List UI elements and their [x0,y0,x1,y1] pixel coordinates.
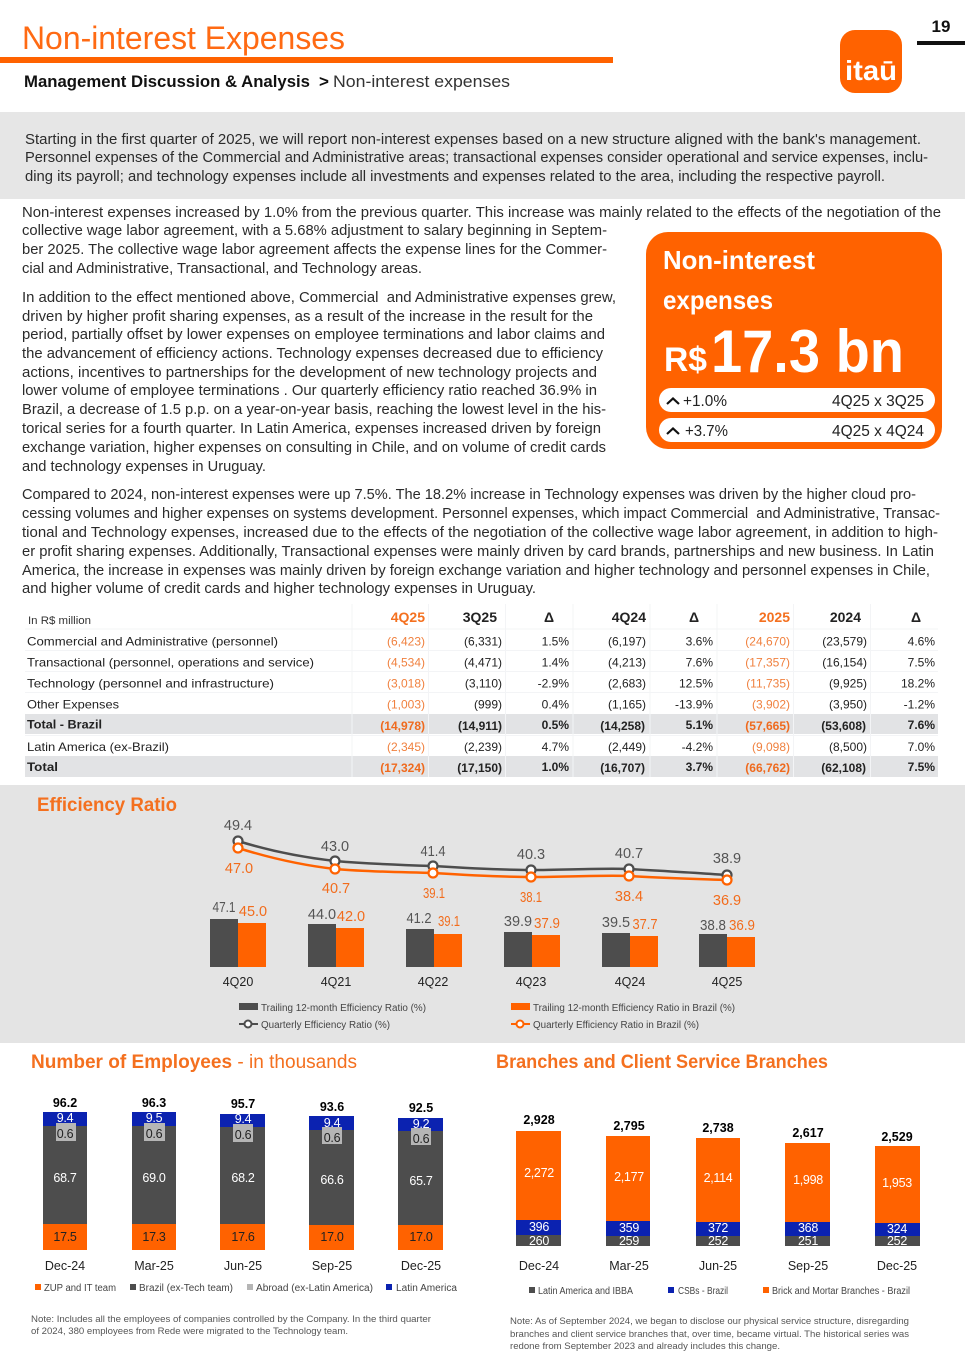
bar: Jun-25: 0.6 [235,1128,252,1142]
bar: Dec-25: 65.7 [409,1174,433,1188]
row: total: (17,324) [380,761,425,775]
pill: quarter on quarter: 4Q25 x 3Q25 [832,393,924,410]
table header: 2025 [759,609,790,625]
bar: Mar-25: 69.0 [142,1171,166,1185]
bar: Mar-25 [606,1119,650,1248]
table header: 4Q25 [391,609,425,625]
intro note band: Starting in the first quarter of 2025, we will report non-interest expenses based on a new structure aligned with the bank's management. [25,132,921,148]
text block: quarterly comparison: cial and Administrative, Transactional, and Technology areas. [22,261,422,277]
row: commercial and administrative: Commercial and Administrative (personnel) [27,634,278,648]
axis labels [519,1259,917,1273]
table header: Δ [911,609,921,625]
bar: Dec-24: 396 [529,1220,549,1234]
bar: Dec-24: 96.2 [53,1096,77,1110]
KPI label [663,245,815,315]
stacked bar chart: employees [43,1096,443,1273]
row: Latin America: -4.2% [682,740,713,754]
text block: drivers: Brazil, a decrease of 1.5 p.p. on a year-on-year basis, reaching the lowest level in the his- [22,402,606,418]
row: total Brazil: 0.5% [542,718,569,732]
bar chart: trailing 12-month ratios: 37.9 [534,916,560,932]
heading: number of employees: Number of Employees - in thousands [31,1051,357,1073]
row: total: (66,762) [745,761,790,775]
row: transactional: 1.4% [542,656,569,670]
row: technology: (3,018) [387,676,425,690]
axis labels: Dec-24 [519,1259,559,1273]
bar chart: trailing 12-month ratios: 44.0 [308,907,336,923]
row: transactional: 7.5% [908,656,935,670]
note: employees [31,1314,431,1337]
axis labels: Dec-25 [877,1259,917,1273]
row: other expenses [27,698,935,712]
row: Latin America: Latin America (ex-Brazil) [27,740,169,754]
bar chart: trailing 12-month ratios [210,900,755,967]
row: Latin America: (8,500) [829,740,867,754]
bar chart: trailing 12-month ratios: 41.2 [406,911,432,927]
bar chart: trailing 12-month ratios: 38.8 [700,918,726,934]
line chart: quarterly efficiency ratio [224,818,741,880]
text block: annual comparison: tional and Technology expenses, increased due to the effects of the negotiation of the collective wage labor agreement, in addition to high- [22,525,938,541]
bar: Jun-25 [696,1121,740,1248]
bar chart: trailing 12-month ratios: 42.0 [337,909,365,925]
panel: branches and client service branches [496,1051,920,1352]
row: commercial and administrative: 3.6% [686,634,713,648]
bar: Dec-24 [43,1096,87,1250]
row: Latin America: (2,239) [464,740,502,754]
row: technology: (3,110) [465,676,502,690]
panel: headline KPI card [646,232,942,449]
legend: employees: ZUP and IT team [44,1283,116,1294]
text block: drivers: actions, incentives to partnerships for the development of new technology projects and [22,365,597,381]
line chart: quarterly efficiency ratio in Brazil: 38.1 [520,890,542,906]
axis labels: Mar-25 [134,1259,174,1273]
legend: efficiency ratio [239,1003,735,1031]
bar: Sep-25: 17.0 [320,1230,344,1244]
text block: annual comparison: and higher volume of credit cards and higher technology expenses in Uruguay. [22,581,536,597]
text block: annual comparison: America, the increase in expenses was mainly driven by foreign exchange variation and higher technology and personnel expenses in Chile, [22,563,930,579]
text block: annual comparison: Compared to 2024, non-interest expenses were up 7.5%. The 18.2% increase in Technology expenses was driven by the higher cloud pro- [22,487,916,503]
note: branches: redone from September 2023 and already includes this change. [510,1341,780,1352]
bar: Jun-25: 252 [708,1234,728,1248]
bar: Dec-25: 17.0 [409,1230,433,1244]
row: commercial and administrative: 4.6% [908,634,935,648]
note: branches [510,1316,909,1352]
row: total Brazil: (14,978) [380,719,425,733]
row: commercial and administrative: (23,579) [822,634,867,648]
bar: Jun-25 [220,1097,265,1250]
legend: branches: Latin America and IBBA [538,1286,633,1297]
row: total: (16,707) [600,761,645,775]
line chart: quarterly efficiency ratio in Brazil: 36.9 [713,893,741,909]
bar: Jun-25: 95.7 [231,1097,255,1111]
pill: quarter on quarter [659,388,935,412]
text block: drivers: and technology expenses in Uruguay. [22,459,266,475]
bar: Dec-25: 252 [887,1234,907,1248]
bar chart: trailing 12-month ratios: 45.0 [239,904,267,920]
row: technology: 18.2% [901,676,935,690]
note: branches: branches and client service branches that, over time, became virtual. The historical series was [510,1329,909,1340]
bar: Sep-25: 1,998 [793,1173,823,1187]
bar: Dec-25: 1,953 [882,1176,912,1190]
bar: Jun-25: 2,738 [702,1121,734,1135]
pill: quarter on quarter: +1.0% [683,393,727,410]
KPI label: expenses [663,285,773,315]
row: Latin America: 7.0% [908,740,935,754]
row: Latin America: (9,098) [752,740,790,754]
axis labels: 4Q22 [418,975,448,989]
row: commercial and administrative: (6,197) [608,634,646,648]
bar: Mar-25: 2,177 [614,1170,644,1184]
row: commercial and administrative [27,634,935,648]
intro note band: ding its payroll; and technology expenses include all investments and expenses related to the area, including the respective payroll. [25,169,885,185]
legend: efficiency ratio: Quarterly Efficiency Ratio (%) [261,1020,390,1031]
table header: Δ [544,609,554,625]
panel: number of employees [31,1051,457,1337]
legend: efficiency ratio: Trailing 12-month Efficiency Ratio in Brazil (%) [533,1003,735,1014]
bar: Sep-25: 0.6 [324,1131,341,1145]
bar chart: trailing 12-month ratios: 39.1 [438,914,460,930]
bar: Sep-25: 66.6 [320,1173,344,1187]
line chart: quarterly efficiency ratio in Brazil: 39.1 [423,886,445,902]
row: transactional [27,656,935,670]
bar: Sep-25 [309,1100,354,1250]
row: other expenses: (1,165) [608,698,646,712]
legend: efficiency ratio: Trailing 12-month Efficiency Ratio (%) [261,1003,426,1014]
text block: drivers: In addition to the effect mentioned above, Commercial and Administrative expenses grew, [22,290,616,306]
pill: year on year: +3.7% [685,423,728,440]
intro note band: Personnel expenses of the Commercial and Administrative areas; transactional expenses consider operational and service expenses, inclu- [25,150,928,166]
bar: Mar-25: 2,795 [613,1119,645,1133]
bar: Dec-25: 92.5 [409,1101,433,1115]
text block: drivers [22,290,616,475]
row: technology: Technology (personnel and infrastructure) [27,676,274,690]
axis labels: Jun-25 [699,1259,737,1273]
legend: employees: Abroad (ex-Latin America) [256,1283,373,1294]
bar: Jun-25: 2,114 [704,1171,733,1185]
title underline [0,57,613,63]
row: other expenses: (3,950) [829,698,867,712]
line chart: quarterly efficiency ratio: 40.3 [517,847,545,863]
line chart: quarterly efficiency ratio: 40.7 [615,846,643,862]
text block: quarterly comparison: ber 2025. The collective wage labor agreement affects the expense lines for the Commer- [22,242,607,258]
table header: In R$ million [28,615,91,627]
legend: branches: CSBs - Brazil [678,1286,728,1297]
text block: drivers: the advancement of efficiency actions. Technology expenses decreased due to efficiency [22,346,604,362]
bar: Dec-25 [398,1101,443,1250]
table header: Δ [689,609,699,625]
text block: quarterly comparison: Non-interest expenses increased by 1.0% from the previous quarter. This increase was mainly related to the effects of the negotiation of the [22,205,941,221]
row: transactional: (16,154) [822,656,867,670]
text block: annual comparison: cessing volumes and higher expenses on systems development. Personnel expenses, which impact Commercial and Administrative, Transac- [22,506,940,522]
bar: Mar-25: 96.3 [142,1096,166,1110]
row: technology: 12.5% [679,676,713,690]
bar: Dec-24 [516,1113,561,1248]
row: Latin America: (2,449) [608,740,646,754]
bar: Dec-24: 2,928 [523,1113,555,1127]
line chart: quarterly efficiency ratio: 38.9 [713,851,741,867]
bar: Dec-25: 9.2 [413,1117,430,1131]
row: total: 7.5% [908,760,935,774]
bar: Dec-24: 68.7 [53,1171,77,1185]
row: total Brazil: (57,665) [745,719,790,733]
axis labels: Jun-25 [224,1259,262,1273]
row: total Brazil [27,718,935,733]
axis labels: Dec-24 [45,1259,85,1273]
text block: drivers: exchange variation, higher expenses on consulting in Chile, and on volume of credit cards [22,440,606,456]
row: total: 1.0% [542,760,569,774]
axis labels: 4Q25 [712,975,742,989]
row: transactional: (4,213) [608,656,646,670]
breadcrumb: Management Discussion & Analysis [24,72,310,91]
line chart: quarterly efficiency ratio: 49.4 [224,818,252,834]
bar: Dec-24: 2,272 [524,1166,554,1180]
bar: Mar-25: 0.6 [146,1127,163,1141]
row: other expenses: (999) [474,698,502,712]
axis labels [45,1259,441,1273]
bar chart: trailing 12-month ratios: 39.5 [602,915,630,931]
bar chart: trailing 12-month ratios: 36.9 [729,918,755,934]
row: transactional: Transactional (personnel, operations and service) [27,656,314,670]
text block: drivers: torical series for a fourth quarter. In Latin America, expenses increased driven by foreign [22,421,601,437]
row: Latin America: (2,345) [387,740,425,754]
bar: Dec-25: 324 [887,1222,907,1236]
bar: Jun-25: 68.2 [231,1171,255,1185]
bar: Sep-25: 93.6 [320,1100,344,1114]
bar: Sep-25: 2,617 [792,1126,824,1140]
stacked bar chart: branches [516,1113,920,1273]
axis labels: Sep-25 [788,1259,828,1273]
row: total: Total [27,760,58,774]
axis labels: 4Q20 [223,975,253,989]
row: commercial and administrative: (24,670) [745,634,790,648]
header [0,17,965,93]
row: technology: (9,925) [829,676,867,690]
row: total Brazil: Total - Brazil [27,718,102,732]
row: Latin America [27,740,935,754]
row: transactional: (4,471) [464,656,502,670]
bar: Dec-25 [875,1130,920,1248]
table header: 4Q24 [612,609,646,625]
axis labels: Sep-25 [312,1259,352,1273]
page number: 19 [932,17,950,36]
line chart: quarterly efficiency ratio: 41.4 [420,844,446,860]
text block: drivers: lower volume of employee terminations . Our quarterly efficiency ratio reached 36.9% in [22,383,597,399]
bar: Dec-24: 9.4 [57,1111,74,1125]
row: Latin America: 4.7% [542,740,569,754]
bar: Sep-25: 251 [798,1234,818,1248]
row: total Brazil: (53,608) [821,719,866,733]
text block: drivers: driven by higher profit sharing expenses, as a result of the increase in the result for the [22,309,593,325]
row: commercial and administrative: (6,331) [464,634,502,648]
axis labels: 4Q23 [516,975,546,989]
row: transactional: (17,357) [745,656,790,670]
row: other expenses: (3,902) [752,698,790,712]
legend: employees [35,1283,457,1294]
row: other expenses: -13.9% [675,698,713,712]
bar chart: trailing 12-month ratios: 47.1 [212,900,236,916]
text block: drivers: period, partially offset by lower expenses on employee terminations and labor claims and [22,327,605,343]
row: technology [27,676,935,690]
note: branches: Note: As of September 2024, we began to disclose our physical service structure, disregarding [510,1316,909,1327]
row: other expenses: Other Expenses [27,698,119,712]
legend: employees: Brazil (ex-Tech team) [139,1283,233,1294]
KPI value: R$ [664,341,707,379]
legend: efficiency ratio: Quarterly Efficiency Ratio in Brazil (%) [533,1020,699,1031]
bar: Mar-25: 259 [619,1234,639,1248]
bar: Jun-25: 372 [708,1221,728,1235]
row: total Brazil: (14,911) [458,719,502,733]
row: technology: (2,683) [608,676,646,690]
breadcrumb current section: Non-interest expenses [333,72,510,91]
row: commercial and administrative: 1.5% [542,634,569,648]
line chart: quarterly efficiency ratio in Brazil: 47.0 [225,861,253,877]
bar: Dec-25: 2,529 [881,1130,913,1144]
pill: year on year [659,418,935,442]
table: non-interest expenses [25,604,938,777]
axis labels [223,975,742,989]
text block: annual comparison [22,487,940,597]
bar: Sep-25 [785,1126,830,1248]
text block: quarterly comparison [22,205,941,277]
text block: annual comparison: er profit sharing expenses. Additionally, Transactional expenses were mainly driven by card brands, partnerships and new business. In Latin [22,544,934,560]
bar: Mar-25: 17.3 [142,1230,166,1244]
legend: employees: Latin America [396,1283,457,1294]
row: other expenses: -1.2% [904,698,935,712]
heading: branches: Branches and Client Service Branches [496,1051,828,1073]
row: total: (17,150) [457,761,502,775]
axis labels: 4Q24 [615,975,645,989]
title: Non-interest Expenses [22,20,345,56]
axis labels: 4Q21 [321,975,351,989]
bar: Mar-25: 359 [619,1221,639,1235]
page number [917,17,965,45]
icon: itau logo [840,30,902,93]
text block: quarterly comparison: collective wage labor agreement, with a 5.68% adjustment to salary beginning in Septem- [22,223,607,239]
legend: branches: Brick and Mortar Branches - Brazil [772,1286,910,1297]
table header: 3Q25 [463,609,497,625]
KPI label: Non-interest [663,245,815,275]
note: employees: of 2024, 380 employees from Rede were migrated to the Technology team. [31,1326,348,1337]
legend: branches [529,1286,910,1297]
line chart: quarterly efficiency ratio: 43.0 [321,839,349,855]
row: other expenses: (1,003) [387,698,425,712]
axis labels: Dec-25 [401,1259,441,1273]
bar chart: trailing 12-month ratios: 37.7 [632,917,658,933]
row: total: (62,108) [821,761,866,775]
bar: Sep-25: 9.4 [324,1116,341,1130]
bar: Mar-25 [132,1096,176,1250]
bar: Dec-25: 0.6 [413,1132,430,1146]
table header: 2024 [830,609,861,625]
note: employees: Note: Includes all the employees of companies controlled by the Company. In the third quarter [31,1314,431,1325]
bar: Jun-25: 17.6 [231,1230,255,1244]
heading: efficiency ratio: Efficiency Ratio [37,794,177,816]
row: commercial and administrative: (6,423) [387,634,425,648]
line chart: quarterly efficiency ratio in Brazil: 38.4 [615,889,643,905]
row: total Brazil: (14,258) [600,719,645,733]
bar: Dec-24: 17.5 [53,1230,77,1244]
line chart: quarterly efficiency ratio in Brazil: 40.7 [322,881,350,897]
panel: efficiency ratio [0,785,965,1043]
row: total: 3.7% [686,760,713,774]
bar: Mar-25: 9.5 [146,1111,163,1125]
icon: itau logo: itaū [845,55,897,86]
row: total [27,760,935,775]
row: transactional: (4,534) [387,656,425,670]
row: total Brazil: 5.1% [686,718,713,732]
axis labels: Mar-25 [609,1259,649,1273]
KPI value: 17.3 bn [711,318,904,385]
intro note band [0,112,965,199]
row: transactional: 7.6% [686,656,713,670]
bar: Dec-24: 260 [529,1234,549,1248]
bar: Dec-24: 0.6 [57,1127,74,1141]
bar chart: trailing 12-month ratios: 39.9 [504,914,532,930]
row: total Brazil: 7.6% [908,718,935,732]
row: other expenses: 0.4% [542,698,569,712]
row: technology: -2.9% [538,676,569,690]
bar: Jun-25: 9.4 [235,1112,252,1126]
table header [28,609,921,627]
line chart: quarterly efficiency ratio in Brazil [225,844,741,909]
breadcrumb separator: > [319,72,329,91]
pill: year on year: 4Q25 x 4Q24 [832,423,924,440]
row: technology: (11,735) [746,676,790,690]
bar: Sep-25: 368 [798,1221,818,1235]
